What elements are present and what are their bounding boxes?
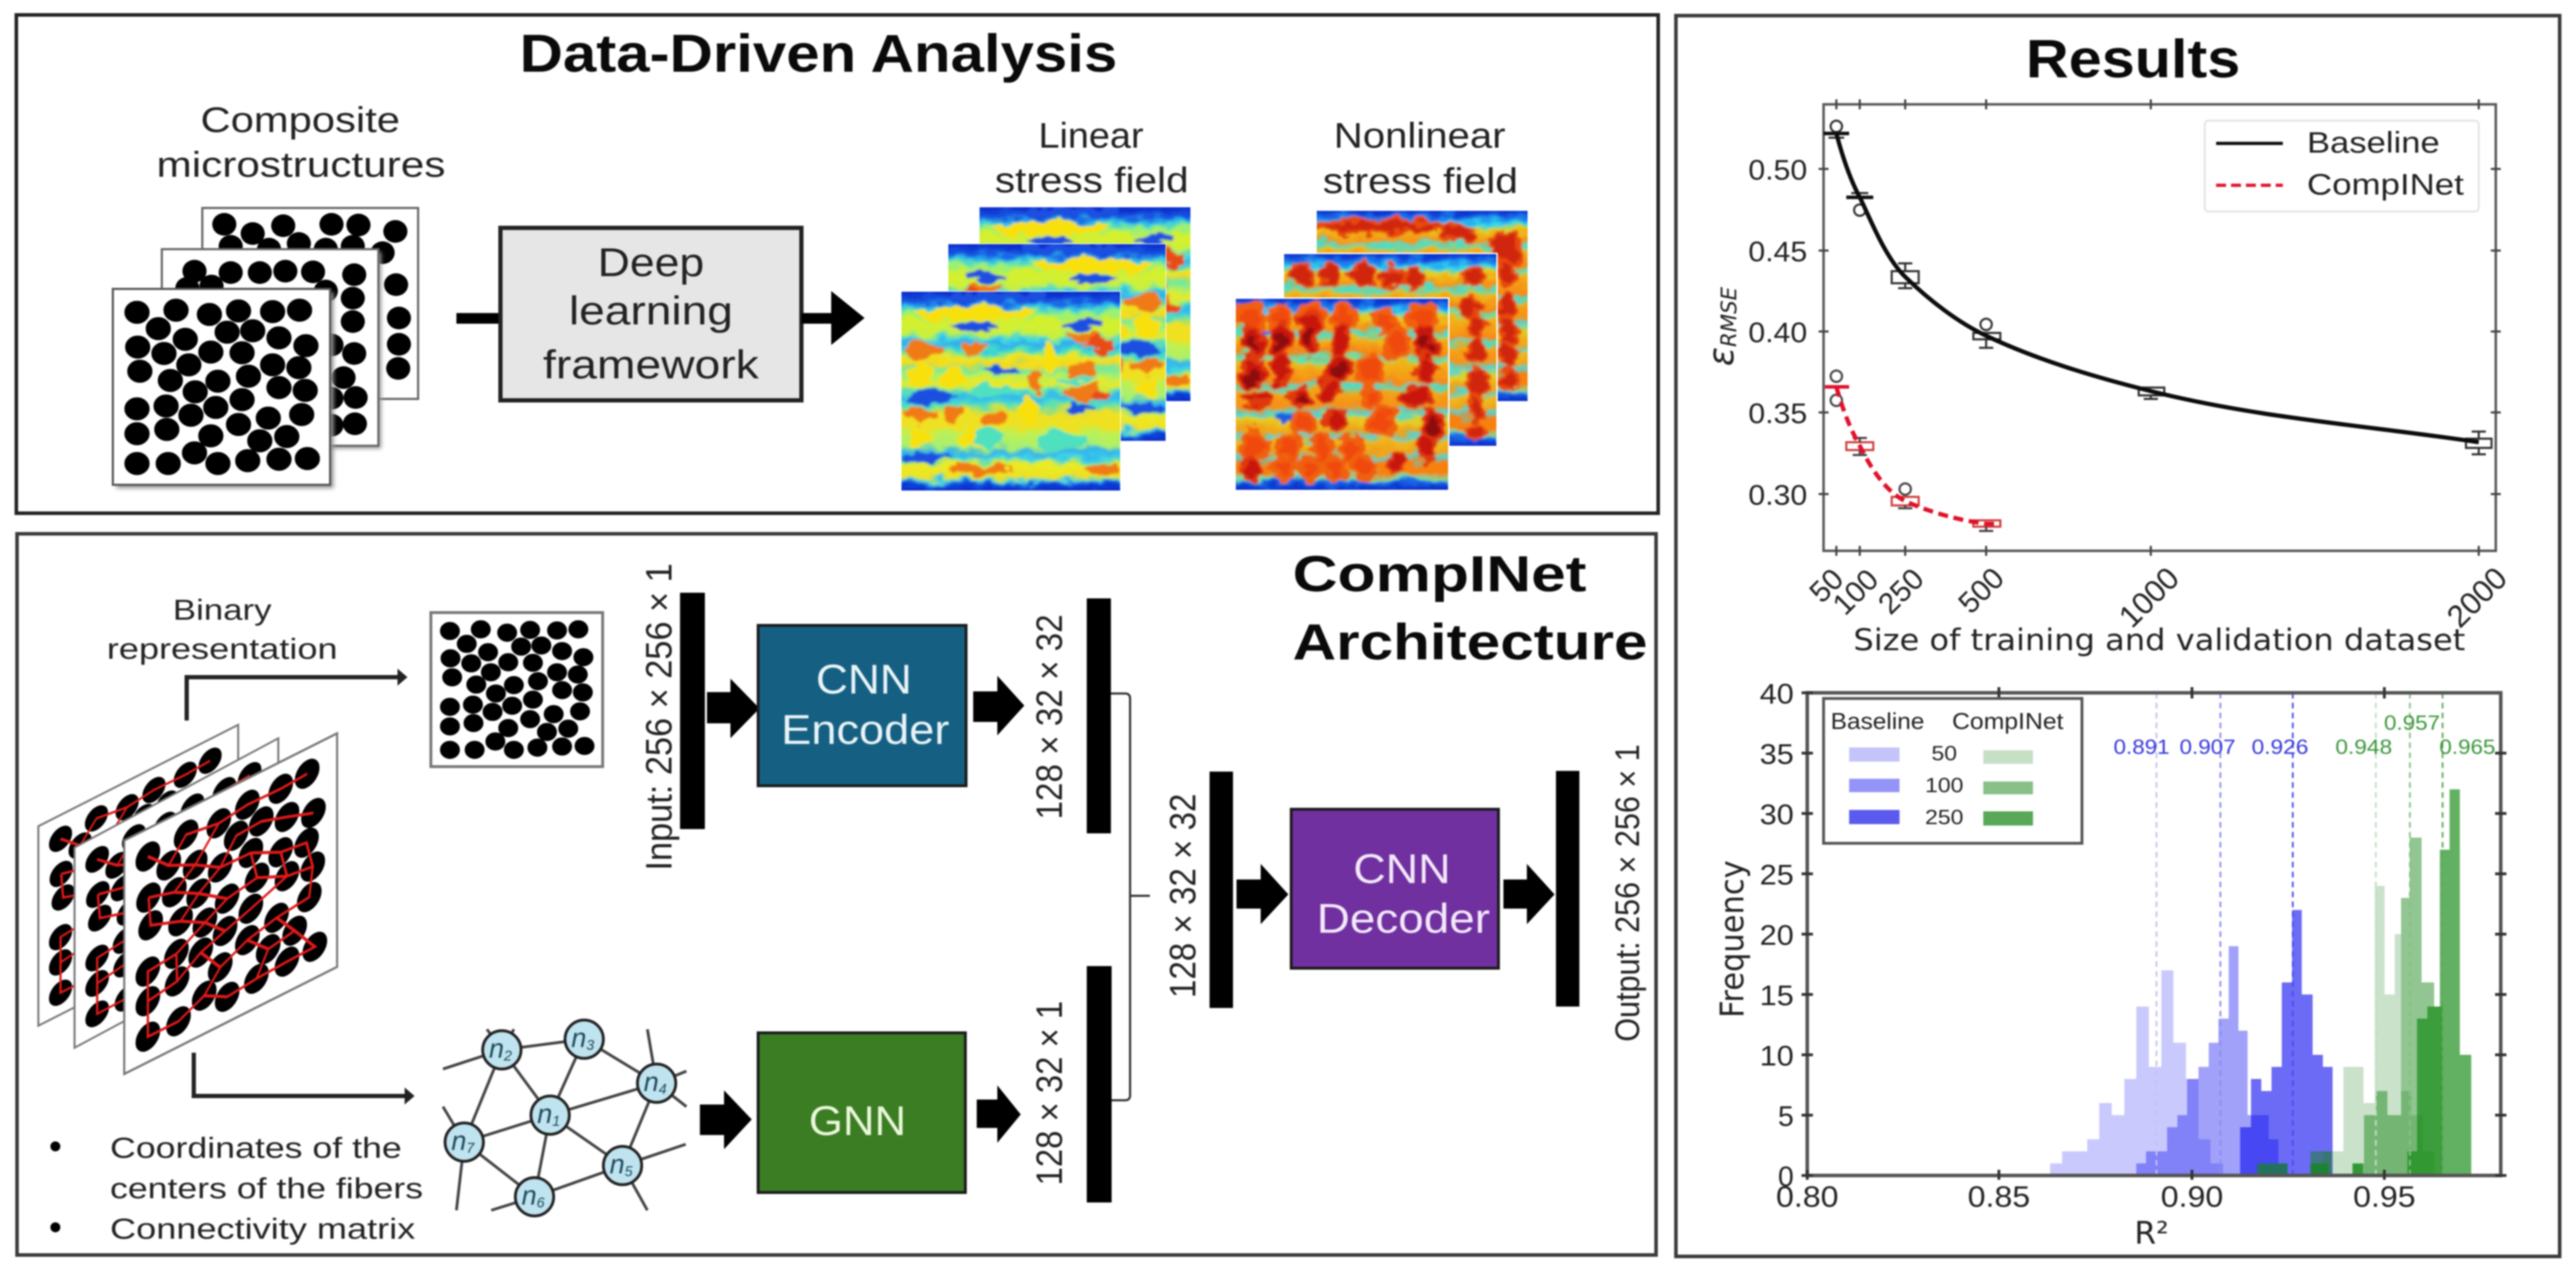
- layer bar: merged features: 128 × 32 × 32: [1163, 794, 1204, 998]
- legend: CompINet: [1952, 708, 2063, 734]
- diagram: fiber graph: n: [451, 1127, 466, 1156]
- layer bar: encoder features: [1029, 598, 1111, 833]
- box: GNN: GNN: [809, 1098, 906, 1144]
- label: composite microstructures: [156, 100, 446, 185]
- diagram: fiber graph: 3: [586, 1038, 594, 1053]
- box: GNN: [758, 1033, 965, 1193]
- mean value labels: 0.948: [2335, 736, 2392, 759]
- diagram: fiber graph: 7: [466, 1141, 475, 1156]
- y axis tick labels: 5: [1778, 1101, 1794, 1132]
- heatmap stack: linear stress field: [901, 207, 1190, 491]
- box plots: CompINet: [1825, 371, 2000, 531]
- arrow: to binary image: [187, 669, 407, 720]
- label: binary representation: [106, 593, 338, 665]
- layer bar: encoder features: 128 × 32 × 32: [1029, 615, 1070, 819]
- y axis tick labels: 30: [1760, 799, 1794, 831]
- box: CNN decoder: CNN: [1353, 846, 1451, 892]
- y axis tick labels: 0.45: [1748, 236, 1807, 268]
- bracket: concatenation: [1111, 694, 1150, 1100]
- heading: CompINet Architecture: [1293, 547, 1648, 671]
- panel: CompINet architecture: [17, 534, 1656, 1255]
- heading: Results: Results: [2026, 29, 2240, 89]
- legend: 50: [1931, 742, 1957, 765]
- arrow: framework to stress fields: [801, 291, 865, 345]
- box plots: baseline: [1824, 121, 2492, 454]
- line: CompINet: [1836, 387, 2000, 524]
- label: binary representation: representation: [106, 632, 338, 665]
- box: deep learning framework: learning: [569, 288, 733, 334]
- mean value labels: 0.907: [2179, 736, 2236, 759]
- legend: 250: [1925, 806, 1963, 829]
- y axis tick labels: 0.30: [1748, 480, 1807, 511]
- label: composite microstructures: microstructures: [156, 145, 446, 185]
- arrow: graph to GNN: [700, 1090, 752, 1149]
- y axis tick labels: [1760, 679, 1794, 1193]
- box: deep learning framework: framework: [543, 342, 760, 388]
- y axis tick labels: 10: [1760, 1041, 1794, 1072]
- x axis tick labels: 100: [1826, 562, 1885, 621]
- box: CNN decoder: Decoder: [1317, 896, 1490, 942]
- layer bar: output: [1556, 744, 1647, 1042]
- x axis title: R²: [2134, 1215, 2169, 1251]
- text: graph inputs list: [50, 1131, 423, 1245]
- mean value labels: [2114, 712, 2496, 759]
- label: linear stress field: stress field: [995, 160, 1188, 200]
- mean value labels: 0.965: [2439, 736, 2496, 759]
- y axis tick labels: 35: [1760, 739, 1794, 770]
- x axis title: Size of training and validation dataset: [1853, 623, 2465, 657]
- y axis title: Frequency: [1713, 860, 1751, 1018]
- diagram: fiber graph: 5: [625, 1164, 633, 1180]
- panel: data-driven analysis: [16, 15, 1658, 513]
- heading: CompINet Architecture: Architecture: [1293, 615, 1648, 671]
- y axis title: RMSE: [1717, 287, 1742, 347]
- label: composite microstructures: Composite: [200, 100, 400, 140]
- axes frame: [1807, 693, 2501, 1175]
- y axis tick labels: 0.40: [1748, 317, 1807, 349]
- x axis tick labels: 1000: [2112, 561, 2186, 635]
- panel: results: [1676, 16, 2560, 1256]
- x axis tick labels: 0.80: [1776, 1180, 1838, 1213]
- x axis tick labels: 500: [1951, 561, 2010, 620]
- arrow: input to framework: [456, 313, 500, 324]
- mean value labels: 0.926: [2252, 736, 2308, 759]
- box: CNN encoder: [758, 625, 966, 786]
- layer bar: input: [639, 564, 705, 870]
- line: baseline: [1836, 133, 2479, 442]
- box: CNN encoder: Encoder: [781, 707, 950, 753]
- heading: CompINet Architecture: CompINet: [1293, 547, 1586, 603]
- text: graph inputs list: Coordinates of the: [110, 1131, 402, 1164]
- diagram: fiber graph: 1: [552, 1114, 560, 1129]
- box: deep learning framework: Deep: [598, 240, 704, 285]
- label: nonlinear stress field: Nonlinear: [1334, 116, 1506, 155]
- arrow: encoder to feature bar: [973, 676, 1024, 735]
- box: CNN decoder: [1291, 809, 1498, 968]
- layer bar: GNN features: [1029, 966, 1112, 1202]
- y axis tick labels: 0.35: [1748, 398, 1807, 429]
- heading: Data-Driven Analysis: Data-Driven Analysis: [520, 23, 1117, 83]
- y axis tick labels: 15: [1760, 980, 1794, 1012]
- diagram: fiber graph: 2: [503, 1048, 512, 1064]
- x axis tick labels: [1776, 1180, 2416, 1213]
- box: deep learning framework: [500, 228, 801, 400]
- diagram: fiber graph: n: [610, 1150, 625, 1180]
- legend: Baseline: [2307, 126, 2440, 159]
- y axis tick labels: 20: [1760, 920, 1794, 951]
- y axis tick labels: 25: [1760, 860, 1794, 891]
- legend: [1824, 698, 2082, 843]
- label: nonlinear stress field: stress field: [1323, 161, 1518, 201]
- chart: RMSE versus training size: [1701, 99, 2514, 657]
- mean value labels: 0.891: [2114, 736, 2169, 759]
- y axis tick labels: [1748, 155, 1807, 511]
- diagram: fiber graph: 6: [537, 1195, 545, 1211]
- layer bar: GNN features: 128 × 32 × 1: [1029, 1001, 1070, 1185]
- heatmap stack: nonlinear stress field: [1234, 211, 1528, 491]
- label: linear stress field: [995, 116, 1188, 200]
- x axis tick labels: [1803, 561, 2514, 635]
- mean value labels: 0.957: [2384, 712, 2440, 735]
- layer bar: merged features: [1163, 772, 1233, 1008]
- x axis tick labels: 0.85: [1968, 1180, 2030, 1213]
- layer bar: input: Input: 256 × 256 × 1: [639, 564, 680, 870]
- x axis tick labels: 0.95: [2353, 1180, 2416, 1213]
- text: graph inputs list: centers of the fibers: [110, 1172, 423, 1205]
- histograms: [2050, 789, 2471, 1175]
- arrow: merged features to decoder: [1237, 864, 1288, 924]
- y axis tick labels: 0: [1778, 1161, 1794, 1193]
- x axis tick labels: 0.90: [2161, 1180, 2223, 1213]
- x axis tick labels: 2000: [2440, 561, 2514, 635]
- x axis tick labels: 250: [1871, 561, 1930, 620]
- x axis tick labels: 50: [1803, 562, 1850, 609]
- legend: CompINet: [2307, 168, 2464, 201]
- diagram: fiber graph: n: [571, 1024, 586, 1053]
- label: nonlinear stress field: [1323, 116, 1518, 201]
- layer bar: output: Output: 256 × 256 × 1: [1609, 744, 1647, 1042]
- arrow: to fiber graph: [194, 1053, 415, 1105]
- arrow: decoder to output: [1503, 864, 1555, 924]
- diagram: fiber graph: [443, 1020, 686, 1216]
- diagram: fiber graph: n: [537, 1100, 552, 1129]
- text: graph inputs list: Connectivity matrix: [110, 1212, 416, 1245]
- legend: [2205, 121, 2479, 212]
- label: binary representation: Binary: [173, 593, 272, 626]
- mean lines: [2156, 693, 2443, 1175]
- diagram: fiber graph: n: [644, 1068, 659, 1097]
- chart: R-squared histograms: [1713, 679, 2506, 1251]
- image: binary microstructure: [431, 613, 603, 767]
- y axis tick labels: 0.50: [1748, 155, 1807, 186]
- diagram: fiber graph: n: [489, 1034, 504, 1064]
- diagram: fiber graph: 4: [659, 1082, 667, 1097]
- image stack: microstructures with fiber graph: [38, 725, 337, 1074]
- diagram: fiber graph: n: [522, 1181, 537, 1211]
- legend: 100: [1925, 774, 1963, 797]
- y axis tick labels: 40: [1760, 679, 1794, 710]
- y axis title: ε: [1701, 347, 1742, 366]
- box: CNN encoder: CNN: [816, 657, 911, 703]
- image stack: composite microstructures: [113, 208, 418, 488]
- label: linear stress field: Linear: [1038, 116, 1144, 155]
- legend: Baseline: [1831, 708, 1924, 734]
- arrow: GNN to feature bar: [977, 1085, 1021, 1143]
- arrow: input to encoder: [707, 679, 760, 738]
